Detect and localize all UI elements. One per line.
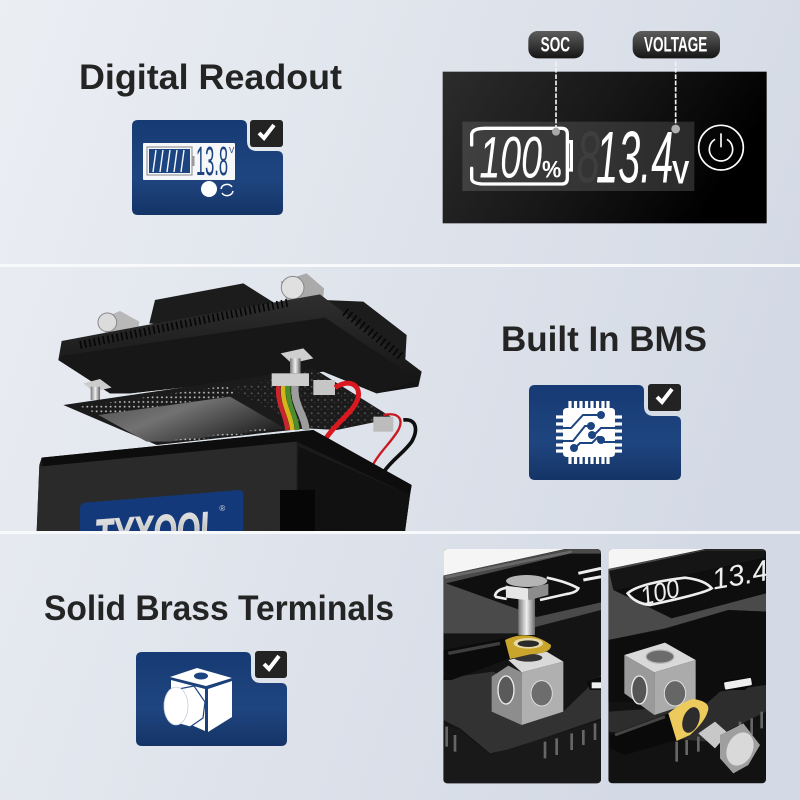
heading: Solid Brass Terminals: Solid Brass Terminals — [44, 589, 394, 628]
callout line: SOC — [552, 62, 560, 136]
blue brand label — [80, 490, 244, 531]
icon: mini LCD screen: V — [229, 146, 235, 155]
blue brand label: TYXOOL — [93, 502, 220, 564]
volt unit: V — [672, 153, 689, 190]
icon: chip — [556, 401, 622, 464]
label: VOLTAGE: VOLTAGE — [644, 33, 707, 57]
icon badge: digital readout — [132, 120, 283, 215]
rear raised lid sections — [149, 283, 407, 365]
ghost digit: 8 — [577, 117, 600, 199]
ribbon wires — [278, 386, 306, 430]
icon: check box, readout — [250, 120, 283, 147]
state of charge value: 100 — [479, 125, 542, 190]
lid with vents — [58, 294, 422, 393]
battery case — [37, 430, 412, 532]
photo: terminal with lug and bolt removed: 13.4 — [709, 554, 771, 596]
heading: Digital Readout: Digital Readout — [79, 58, 342, 97]
voltage value: 13.4 — [596, 117, 673, 199]
icon badge: digital readout: 13.8 — [196, 138, 228, 184]
battery cutaway illustration — [36, 274, 422, 531]
label: VOLTAGE — [633, 31, 720, 58]
panel: LCD display close-up — [443, 31, 767, 223]
heading: Built In BMS: Built In BMS — [501, 320, 707, 359]
icon: check box, terminals — [255, 651, 287, 678]
LCD window — [462, 122, 694, 191]
rear terminal right — [281, 273, 324, 302]
callout line: voltage — [671, 62, 680, 133]
rear terminal left — [98, 311, 139, 335]
circuit board — [63, 368, 393, 445]
label: SOC: SOC — [541, 33, 570, 57]
icon: check box, BMS — [648, 384, 681, 411]
photo: terminal assembled with bolt above — [443, 549, 601, 783]
icon badge: BMS chip — [529, 385, 681, 480]
left standoff — [83, 379, 112, 400]
percent sign: % — [542, 156, 561, 183]
icon: terminal block and bolt — [163, 668, 232, 732]
photo: terminal with lug and bolt removed — [608, 549, 771, 783]
photo: terminal with lug and bolt removed: 100 — [637, 573, 683, 611]
icon badge: brass terminal — [136, 652, 287, 746]
label: SOC — [528, 31, 584, 58]
side wires, red and black — [373, 414, 415, 472]
icon: mini LCD screen — [143, 138, 235, 184]
front standoff and connector — [272, 348, 335, 395]
icon: mode button dot — [201, 181, 217, 197]
blue brand label: ® — [219, 504, 225, 513]
red power wire — [326, 383, 359, 438]
icon: cycle arrows — [221, 184, 233, 196]
icon: power button — [699, 125, 743, 170]
battery outline — [472, 128, 571, 184]
